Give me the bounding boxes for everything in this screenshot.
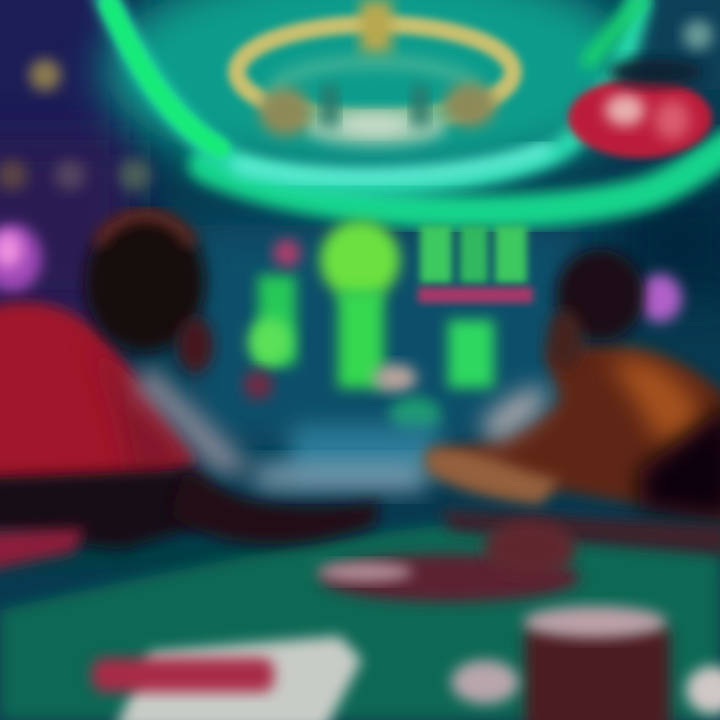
chip stack bottom right bbox=[451, 606, 720, 720]
chandelier bbox=[237, 0, 513, 146]
chip stacks centre bbox=[317, 510, 720, 602]
neon ceiling ring bbox=[105, 0, 720, 212]
wall lights bbox=[0, 20, 713, 322]
right player bbox=[425, 249, 720, 520]
left player bbox=[0, 212, 380, 572]
card on table bbox=[92, 636, 362, 720]
table felt bbox=[0, 425, 720, 720]
slot machine screens bbox=[243, 220, 533, 433]
roulette wheel bbox=[568, 58, 712, 158]
